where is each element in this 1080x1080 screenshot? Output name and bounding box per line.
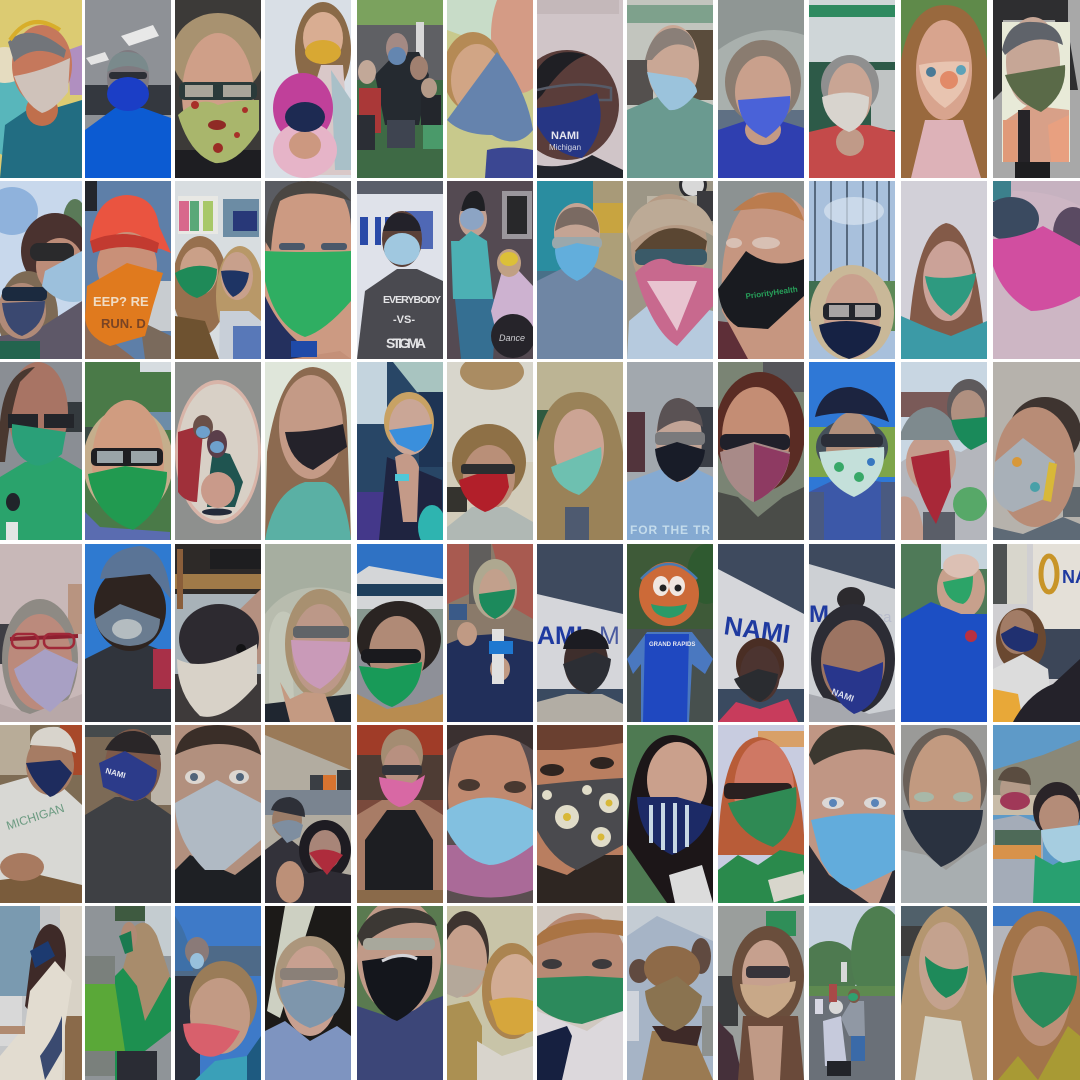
mask xyxy=(740,981,796,1018)
mask logo text: NAMI xyxy=(104,766,127,780)
mask xyxy=(655,442,705,482)
shirt slogan: -VS- xyxy=(393,314,415,326)
mask xyxy=(384,233,420,265)
bag text: Dance xyxy=(499,333,525,343)
mask xyxy=(647,72,697,110)
photo: girl in car, blowing kiss xyxy=(357,362,443,540)
photo: woman with braids before NAMI sign xyxy=(993,544,1080,722)
mask xyxy=(635,259,713,346)
photo: man in white shirt and tie, green mask xyxy=(534,906,626,1080)
mask xyxy=(479,589,515,619)
mask xyxy=(291,640,350,689)
mask xyxy=(447,964,485,998)
photo: woman with blue NAMI mask: hica xyxy=(864,609,892,626)
mask xyxy=(537,778,623,870)
mask xyxy=(728,787,797,847)
photo: woman in red cap, orange gaiter xyxy=(85,181,171,359)
photo: person with denim cap, patterned mask xyxy=(85,544,171,722)
photo: woman with glasses and orange lanyard xyxy=(718,906,804,1080)
shirt slogan xyxy=(383,294,441,351)
photo: couple at festival, bandana and green mask xyxy=(901,362,987,540)
photo: child with coral mask, boat xyxy=(175,906,261,1080)
photo: woman in red shirt, white mask xyxy=(809,0,895,178)
mask xyxy=(107,77,149,111)
mask xyxy=(379,775,425,807)
photo: woman with gray slicked hair, dark mask xyxy=(901,725,987,903)
photo: dog with patterned mask xyxy=(627,906,713,1080)
sign text: M xyxy=(809,601,829,628)
mask xyxy=(925,273,976,316)
photo: two women under sky xyxy=(0,181,82,359)
mask xyxy=(551,447,602,495)
mask xyxy=(42,251,82,302)
mask xyxy=(359,662,422,707)
photo: person with blue surgical mask xyxy=(627,0,713,178)
mask xyxy=(175,266,217,298)
photo: dog with floral mask xyxy=(175,544,261,722)
photo: basketball mascot xyxy=(627,544,727,722)
mask xyxy=(819,321,881,359)
photo: woman with aviators, pink mask xyxy=(993,181,1080,359)
photo: man with blue surgical mask xyxy=(809,725,895,903)
mask xyxy=(537,976,623,1024)
mask xyxy=(563,652,611,694)
mask xyxy=(12,424,66,466)
mask xyxy=(1000,792,1030,810)
gaiter text: EEP? RE xyxy=(93,294,149,309)
mask xyxy=(389,424,432,452)
jersey text: GRAND RAPIDS xyxy=(649,642,695,648)
photo: woman with blue NAMI mask xyxy=(809,544,895,722)
photo: woman with auburn hair, green mask xyxy=(901,181,987,359)
mask xyxy=(848,993,858,1001)
photo: woman with beanie, camo mask xyxy=(993,0,1080,178)
photo: mother and daughter in teal tank xyxy=(447,181,533,359)
mask xyxy=(177,644,257,717)
photo: woman with auburn hair and yellow top, green mask xyxy=(993,906,1080,1080)
mask xyxy=(823,662,883,714)
mask xyxy=(362,956,432,1021)
photo: woman with shibori mask xyxy=(627,725,713,903)
photo: young man, gray marbled mask xyxy=(175,725,261,903)
photo: older woman with gray patterned mask xyxy=(265,906,351,1080)
photo: man before NAMI sign, black mask: M xyxy=(599,622,620,650)
mask xyxy=(99,751,157,801)
photo: person in car, black mask xyxy=(627,362,713,540)
mask xyxy=(822,92,869,132)
photo: woman with short hair, gray floral mask xyxy=(993,362,1080,540)
sign text: NAMI xyxy=(722,610,792,649)
mask xyxy=(175,780,261,870)
photo: blonde woman with green mask xyxy=(901,906,987,1080)
photo: man in Michigan State shirt xyxy=(0,725,82,903)
mask xyxy=(459,474,509,512)
mask xyxy=(178,100,259,163)
photo: couple in oval mirror xyxy=(175,362,261,540)
photo: basketball court with kids xyxy=(799,906,907,1080)
photo: TV reporter with microphone xyxy=(447,544,533,722)
shirt slogan: EVERYBODY xyxy=(383,294,441,306)
photo: woman with long hair, floral mask xyxy=(901,0,987,178)
mask xyxy=(645,976,702,1031)
shirt text: MICHIGAN xyxy=(5,801,66,833)
mask logo text: NAMI xyxy=(830,686,855,704)
photo: mother and daughter with striped and yellow masks xyxy=(441,906,542,1080)
mask xyxy=(993,438,1055,512)
photo: couple in restaurant xyxy=(265,725,351,903)
photo: blonde woman before glass building xyxy=(809,181,895,359)
mask xyxy=(85,263,163,346)
mask xyxy=(718,251,804,329)
mask xyxy=(285,424,347,470)
mask xyxy=(265,251,351,337)
photo: two women in office xyxy=(175,181,261,359)
mask xyxy=(943,576,973,604)
photo: woman with curly hair, sunglasses, green mask xyxy=(357,544,443,722)
photo: man with PriorityHealth mask xyxy=(718,181,804,359)
shirt slogan: STIGMA xyxy=(386,335,426,351)
mask xyxy=(734,669,778,702)
photo: woman thumbs up, pink floral mask xyxy=(265,544,351,722)
mask xyxy=(272,820,303,843)
mask xyxy=(119,931,133,954)
mask xyxy=(951,417,987,450)
mask xyxy=(919,61,969,108)
photo: woman in green polo, green mask xyxy=(0,362,82,540)
mask xyxy=(447,52,533,141)
mask xyxy=(819,447,884,497)
photo: man with black mask, navy shirt xyxy=(357,898,443,1080)
photo: red-haired woman with sunglasses xyxy=(718,725,809,903)
mask xyxy=(14,58,70,113)
mask xyxy=(305,40,341,64)
mask xyxy=(1013,972,1077,1028)
photo: woman with glasses, lilac mask xyxy=(0,544,82,722)
mask xyxy=(460,208,484,230)
photo: woman with poppy mask xyxy=(175,0,261,178)
mask xyxy=(537,93,601,158)
photo: woman in black tank, tie-dye mask xyxy=(357,725,443,903)
mask xyxy=(1001,626,1038,652)
photo: blonde woman outdoors, green mask xyxy=(85,362,171,540)
photo: woman in red cap, orange gaiter: RUN. D xyxy=(101,316,146,331)
photo: woman with daisy mask xyxy=(537,725,623,903)
mask logo text: PriorityHealth xyxy=(745,285,798,301)
photo: older woman, red mask xyxy=(447,362,533,540)
photo: man in dark polo, blue NAMI mask xyxy=(85,725,171,903)
mask xyxy=(903,810,983,867)
photo: mother and boy, shared blue mask xyxy=(447,0,533,178)
mask xyxy=(279,980,345,1028)
mask xyxy=(637,797,713,855)
photo: woman in green shirt with bag xyxy=(85,906,171,1080)
mask xyxy=(190,953,204,969)
photo: woman, blue surgical mask close-up xyxy=(447,720,533,903)
photo: man in blue polo, blue mask xyxy=(85,0,171,178)
mask xyxy=(388,47,406,65)
photo: man with cap, floral pink mask xyxy=(627,181,713,359)
photo: family outdoors xyxy=(357,0,443,178)
mask xyxy=(1005,65,1065,112)
photo: boy and woman outside building xyxy=(993,725,1080,903)
mask xyxy=(88,466,167,530)
photo: woman with long hair, aqua mask xyxy=(537,362,623,540)
photo: man with NAMI Michigan mask: Michigan xyxy=(549,143,581,152)
mask xyxy=(26,760,72,797)
mask xyxy=(720,442,790,502)
mask xyxy=(925,956,968,998)
photo: nurse with green polo xyxy=(537,181,623,359)
mask logo text: NAMI xyxy=(551,130,579,142)
photo: person with navy cap, floral mask xyxy=(809,362,895,540)
mask xyxy=(196,426,210,438)
photo: man before NAMI sign, black mask xyxy=(537,544,623,722)
mask xyxy=(447,798,533,865)
sign text: AMI xyxy=(537,622,583,650)
mask xyxy=(811,813,895,890)
photo: man with NAMI Michigan mask xyxy=(537,0,623,178)
mask xyxy=(555,243,599,281)
mask xyxy=(30,941,55,968)
mask xyxy=(14,649,78,712)
photo: woman close-up, green mask xyxy=(265,181,351,359)
photo: man with cap, cream mask xyxy=(0,0,82,178)
photo: bald man in blue Nike shirt xyxy=(901,544,987,722)
photo: woman in car, bee mask xyxy=(718,0,804,178)
photo: woman in pink before NAMI sign xyxy=(718,544,804,722)
shirt text: FOR THE TR xyxy=(630,523,710,537)
photo: woman in printed dress xyxy=(0,906,82,1080)
mask xyxy=(993,226,1080,311)
photo: woman with brown hair, paisley mask xyxy=(718,362,804,540)
mask xyxy=(95,604,160,646)
mask xyxy=(738,96,790,138)
photo: woman with brown hair, black mask xyxy=(265,362,351,540)
photo: girl with plush toy, yellow mask xyxy=(265,0,351,178)
mask xyxy=(651,604,687,618)
photo: man with Everybody vs Stigma shirt xyxy=(357,181,443,359)
